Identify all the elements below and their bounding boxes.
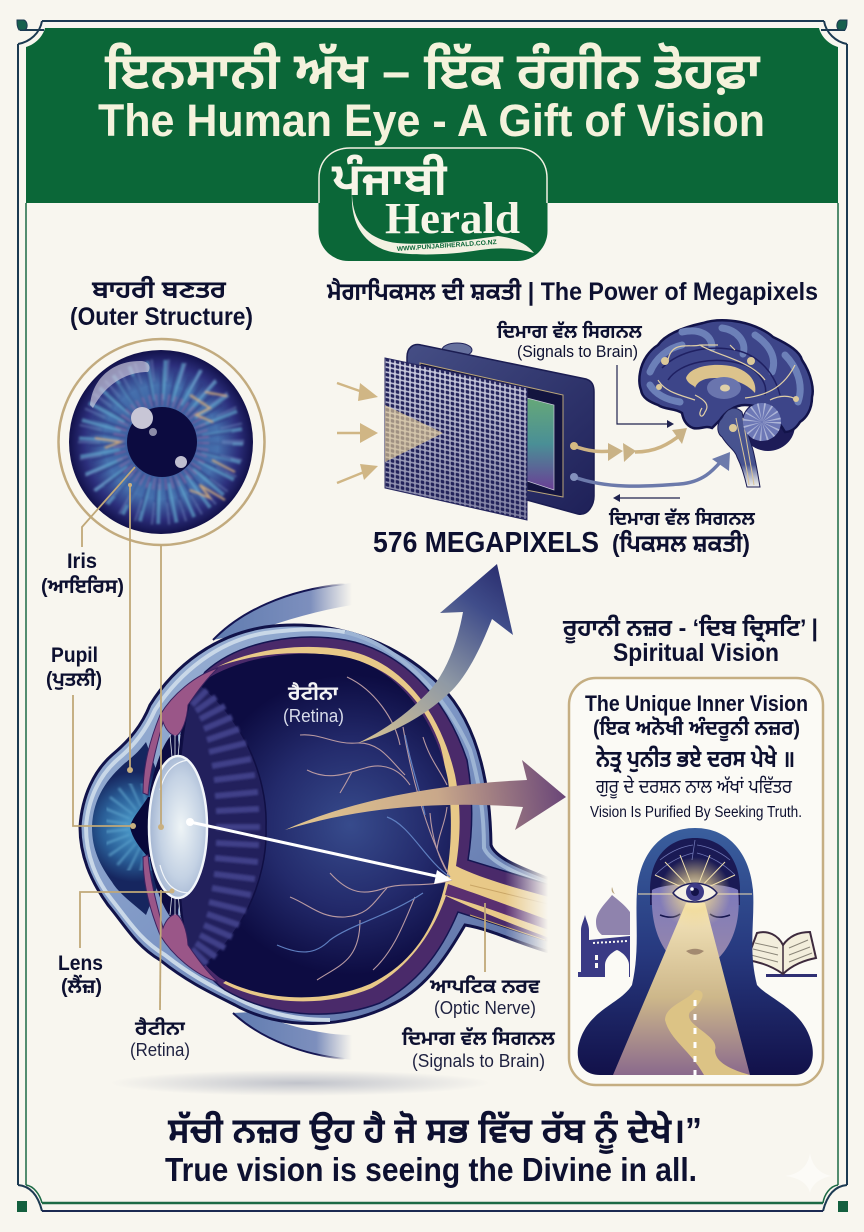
label: optic nerve (429, 974, 541, 1018)
closing quote: ਸੱਚੀ ਨਜ਼ਰ ਉਹ ਹੈ ਜੋ ਸਭ ਵਿੱਚ ਰੱਬ ਨੂੰ ਦੇਖੇ।” (167, 1109, 702, 1155)
panel: spiritual vision (569, 678, 823, 1085)
heading: spiritual vision: ਰੂਹਾਨੀ ਨਜ਼ਰ - ‘ਦਿਬ ਦ੍ਰਿਸਟਿ’ | (562, 614, 818, 643)
vitreous interior (170, 654, 451, 997)
heading: spiritual vision: Spiritual Vision (613, 639, 779, 667)
annotation: signals to brain (top) (496, 320, 674, 428)
label: pupil: (ਪੁਤਲੀ) (46, 667, 102, 691)
label: pupil: Pupil (51, 644, 98, 667)
nerve fade (505, 858, 565, 962)
closing quote: True vision is seeing the Divine in all. (165, 1151, 697, 1188)
panel text block (585, 691, 808, 821)
logo: Punjabi Herald: ਪੰਜਾਬੀ (331, 152, 447, 205)
light arrows into sensor (337, 383, 378, 483)
lens (149, 756, 207, 898)
label: lens: Lens (58, 952, 103, 975)
choroid (175, 637, 560, 1014)
labels left: iris: (ਆਇਰਿਸ) (41, 574, 124, 598)
annotation: signals to brain (lower) (608, 494, 755, 530)
label: retina bottom (130, 1016, 190, 1060)
title (98, 42, 765, 146)
label: retina bottom: (Retina) (130, 1040, 190, 1060)
label: signals to brain: (Signals to Brain) (412, 1051, 545, 1071)
leader lines (73, 467, 485, 1010)
label: retina inside eye (283, 681, 344, 726)
logo: Punjabi Herald: WWW.PUNJABIHERALD.CO.NZ (397, 239, 497, 253)
heading: outer structure: ਬਾਹਰੀ ਬਣਤਰ (91, 275, 226, 304)
logo: Punjabi Herald (318, 148, 548, 261)
iris and ciliary body (143, 668, 218, 795)
leader dots (127, 483, 174, 894)
illustration: woman with third eye (578, 828, 813, 1075)
label: lens: (ਲੈਂਜ਼) (61, 974, 102, 998)
sclera outer wall (80, 625, 560, 1024)
panel text block: ਗੁਰੂ ਦੇ ਦਰਸ਼ਨ ਨਾਲ ਅੱਖਾਂ ਪਵਿੱਤਰ (595, 775, 793, 800)
576 megapixels: 576 MEGAPIXELS (373, 527, 599, 559)
label: retina inside eye: ਰੈਟੀਨਾ (287, 681, 339, 705)
label: pupil (46, 644, 102, 691)
large arrow to spiritual vision (285, 760, 566, 830)
eye cross-section (80, 564, 566, 1096)
label: retina inside eye: (Retina) (283, 706, 344, 726)
panel text block: Vision Is Purified By Seeking Truth. (590, 804, 802, 821)
annotation: signals to brain (top): (Signals to Brain) (517, 342, 638, 361)
heading: power of megapixels: ਮੈਗਾਪਿਕਸਲ ਦੀ ਸ਼ਕਤੀ | The Power of Megapixels (326, 277, 818, 306)
icon: mosque (578, 887, 630, 977)
retina band and optic nerve (217, 647, 560, 1001)
title: ਇਨਸਾਨੀ ਅੱਖ – ਇੱਕ ਰੰਗੀਨ ਤੋਹਫ਼ਾ (104, 42, 761, 101)
ciliary crescent (178, 683, 266, 970)
label: retina bottom: ਰੈਟੀਨਾ (134, 1016, 186, 1040)
heading: outer structure: (Outer Structure) (70, 303, 253, 331)
label: signals to brain (401, 1026, 556, 1071)
output signal arrows (570, 428, 730, 486)
576 megapixels (373, 527, 750, 559)
labels left: iris (41, 550, 124, 598)
sparkle watermark (785, 1153, 832, 1193)
panel text block: ਨੇਤ੍ਰ ਪੁਨੀਤ ਭਏ ਦਰਸ ਪੇਖੇ ॥ (595, 745, 795, 774)
large arrow to megapixels (358, 564, 513, 743)
heading: spiritual vision (562, 614, 818, 667)
label: lens (58, 952, 103, 998)
retinal vessels (290, 677, 452, 980)
annotation: signals to brain (top): ਦਿਮਾਗ ਵੱਲ ਸਿਗਨਲ (496, 320, 642, 343)
ground shadow (110, 1070, 490, 1096)
heading: outer structure (70, 275, 253, 331)
brain illustration (639, 320, 813, 487)
green header banner (26, 28, 838, 203)
camera sensor illustration (337, 343, 730, 520)
label: optic nerve: (Optic Nerve) (434, 998, 536, 1018)
annotation: signals to brain (lower): ਦਿਮਾਗ ਵੱਲ ਸਿਗਨਲ (608, 507, 755, 530)
label: optic nerve: ਆਪਟਿਕ ਨਰਵ (429, 974, 541, 998)
title: The Human Eye - A Gift of Vision (98, 95, 765, 146)
closing quote (165, 1109, 702, 1188)
576 megapixels: (ਪਿਕਸਲ ਸ਼ਕਤੀ) (612, 529, 750, 558)
iris illustration (58, 339, 264, 545)
icon: open book (747, 932, 817, 977)
cornea and iris front (92, 742, 160, 915)
panel text block: (ਇਕ ਅਨੋਖੀ ਅੰਦਰੂਨੀ ਨਜ਼ਰ) (593, 716, 800, 742)
muscle tails (213, 583, 352, 1060)
logo: Punjabi Herald: Herald (385, 194, 520, 243)
white light ray arrow (186, 818, 452, 884)
panel text block: The Unique Inner Vision (585, 691, 808, 716)
labels left: iris: Iris (67, 550, 97, 573)
label: signals to brain: ਦਿਮਾਗ ਵੱਲ ਸਿਗਨਲ (401, 1026, 556, 1050)
